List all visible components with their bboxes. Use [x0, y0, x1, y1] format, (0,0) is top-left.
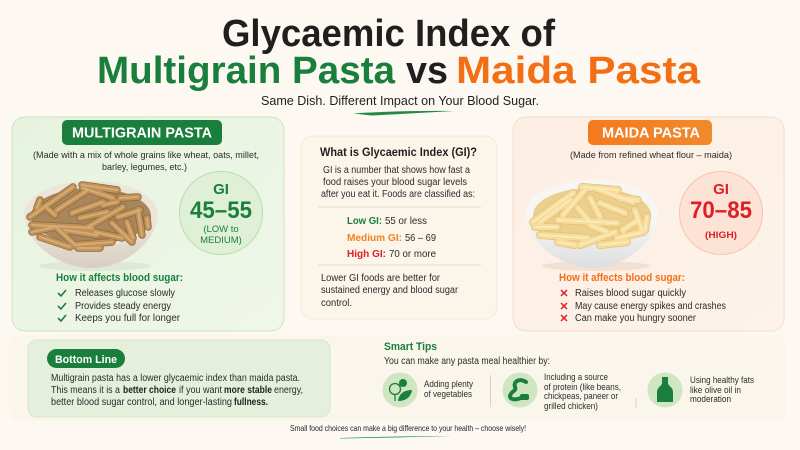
footer underline [340, 436, 453, 438]
GI conclusion: sustained energy and blood sugar [321, 285, 459, 296]
tip: healthy fats: Using healthy fats [690, 375, 754, 386]
panel: smart tips [382, 341, 754, 412]
bottom line pill: Bottom Line [55, 354, 117, 366]
footer note: Small food choices can make a big difference to your health – choose wisely! [290, 423, 526, 433]
smart tips heading: Smart Tips [384, 341, 437, 353]
GI definition: food raises your blood sugar levels [323, 177, 467, 188]
cross list: Raises blood sugar quickly [575, 288, 686, 299]
bottom line text: Multigrain pasta has a lower glycaemic index than maida pasta. [51, 373, 300, 384]
tip: protein [544, 372, 621, 412]
icon: vegetables [382, 372, 418, 408]
maida blood sugar effects [559, 272, 726, 324]
bottom line pill [47, 349, 125, 368]
GI definition: GI is a number that shows how fast a [323, 165, 470, 176]
tip: healthy fats [690, 375, 754, 405]
cross list: May cause energy spikes and crashes [575, 301, 726, 312]
GI badge: 70-85: (HIGH) [705, 230, 737, 241]
tip: vegetables: of vegetables [424, 389, 472, 400]
bottom line text: if you want [179, 385, 222, 396]
tip: vegetables [424, 379, 473, 400]
multigrain badge [62, 120, 222, 145]
cross list: Can make you hungry sooner [575, 313, 697, 324]
maida badge: MAIDA PASTA [602, 124, 700, 142]
multigrain description: (Made with a mix of whole grains like wheat, oats, millet, [33, 150, 259, 161]
panel: what is glycaemic index [301, 136, 497, 319]
maida badge [588, 120, 712, 145]
subtitle: Same Dish. Different Impact on Your Blood Sugar. [261, 93, 539, 108]
check list: Releases glucose slowly [75, 288, 175, 299]
GI classification list: 55 or less [385, 215, 427, 227]
GI conclusion: control. [321, 298, 352, 309]
GI classification list [347, 215, 436, 260]
image: bowl of maida pasta [526, 180, 658, 271]
GI badge: 45-55: GI [213, 181, 229, 198]
GI badge: 70-85: 70–85 [690, 197, 752, 224]
bottom band background [9, 335, 786, 421]
GI badge: 45-55: (LOW to [203, 224, 239, 235]
tip: protein: Including a source [544, 372, 608, 383]
GI badge: 45-55: MEDIUM) [200, 235, 242, 246]
GI conclusion [321, 273, 459, 309]
maida blood sugar effects: How it affects blood sugar: [559, 272, 685, 284]
title: vs [406, 50, 448, 92]
maida description: (Made from refined wheat flour – maida) [570, 150, 732, 161]
multigrain blood sugar effects [56, 272, 183, 324]
multigrain blood sugar effects: How it affects blood sugar: [56, 272, 183, 284]
GI definition [321, 165, 475, 200]
multigrain description: barley, legumes, etc.) [102, 162, 187, 173]
GI classification list: Low GI: [347, 215, 382, 227]
title [97, 13, 701, 92]
bottom line text: energy, [274, 385, 303, 396]
bottom line text: fullness. [234, 397, 268, 408]
GI badge: 70-85: GI [713, 181, 729, 198]
tip: protein: chickpeas, paneer or [544, 391, 618, 402]
title: Multigrain Pasta [97, 50, 396, 92]
tip: healthy fats: like olive oil in [690, 385, 741, 396]
tip: protein: of protein (like beans, [544, 382, 621, 393]
check list: Provides steady energy [75, 301, 171, 312]
GI classification list: High GI: [347, 248, 386, 260]
title: Glycaemic Index of [222, 13, 555, 55]
check list [58, 288, 181, 324]
multigrain badge: MULTIGRAIN PASTA [72, 124, 212, 142]
tip: healthy fats: moderation [690, 394, 731, 405]
icon: protein [502, 372, 538, 408]
tip: protein: grilled chicken) [544, 401, 598, 412]
GI classification list: Medium GI: [347, 232, 402, 244]
subtitle underline [353, 111, 454, 116]
check list: Keeps you full for longer [75, 313, 181, 324]
multigrain description [33, 150, 259, 173]
panel: bottom line [28, 340, 330, 417]
bottom line text [51, 373, 303, 408]
bottom line text: better choice [123, 385, 176, 396]
tip: vegetables: Adding plenty [424, 379, 473, 390]
panel: maida pasta [513, 117, 784, 331]
GI badge: 45-55: 45–55 [190, 197, 252, 224]
icon: olive oil bottle [648, 372, 682, 408]
image: bowl of multigrain pasta [24, 181, 158, 271]
GI definition: after you eat it. Foods are classified as: [321, 189, 475, 200]
GI badge: 70-85 [680, 172, 762, 254]
title: Maida Pasta [456, 50, 701, 92]
cross list [561, 288, 726, 324]
GI badge: 45-55 [180, 172, 262, 254]
GI classification list: 56 – 69 [405, 232, 436, 244]
GI conclusion: Lower GI foods are better for [321, 273, 441, 284]
bottom line text: more stable [224, 385, 272, 396]
GI classification list: 70 or more [389, 248, 436, 260]
panel: multigrain pasta [12, 117, 284, 331]
smart tips intro: You can make any pasta meal healthier by: [384, 356, 550, 367]
bottom line text: better blood sugar control, and longer-lasting [51, 397, 232, 408]
GI heading: What is Glycaemic Index (GI)? [320, 145, 477, 159]
bottom line text: This means it is a [51, 385, 120, 396]
